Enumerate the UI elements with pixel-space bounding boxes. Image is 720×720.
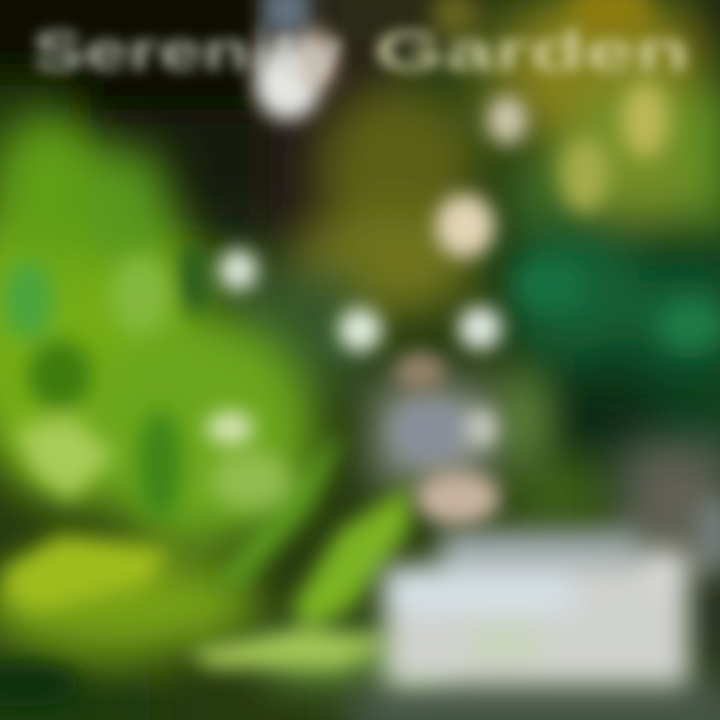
- right foliage: [500, 0, 720, 530]
- title: Garden: [374, 19, 690, 82]
- title: Serenity: [32, 19, 342, 82]
- left bright foliage: [0, 115, 440, 720]
- title: [32, 19, 690, 82]
- highlights and blossoms: [206, 0, 527, 525]
- dark upper background: [0, 0, 520, 390]
- stone panel: [382, 500, 720, 687]
- centre path and stone: [350, 385, 720, 720]
